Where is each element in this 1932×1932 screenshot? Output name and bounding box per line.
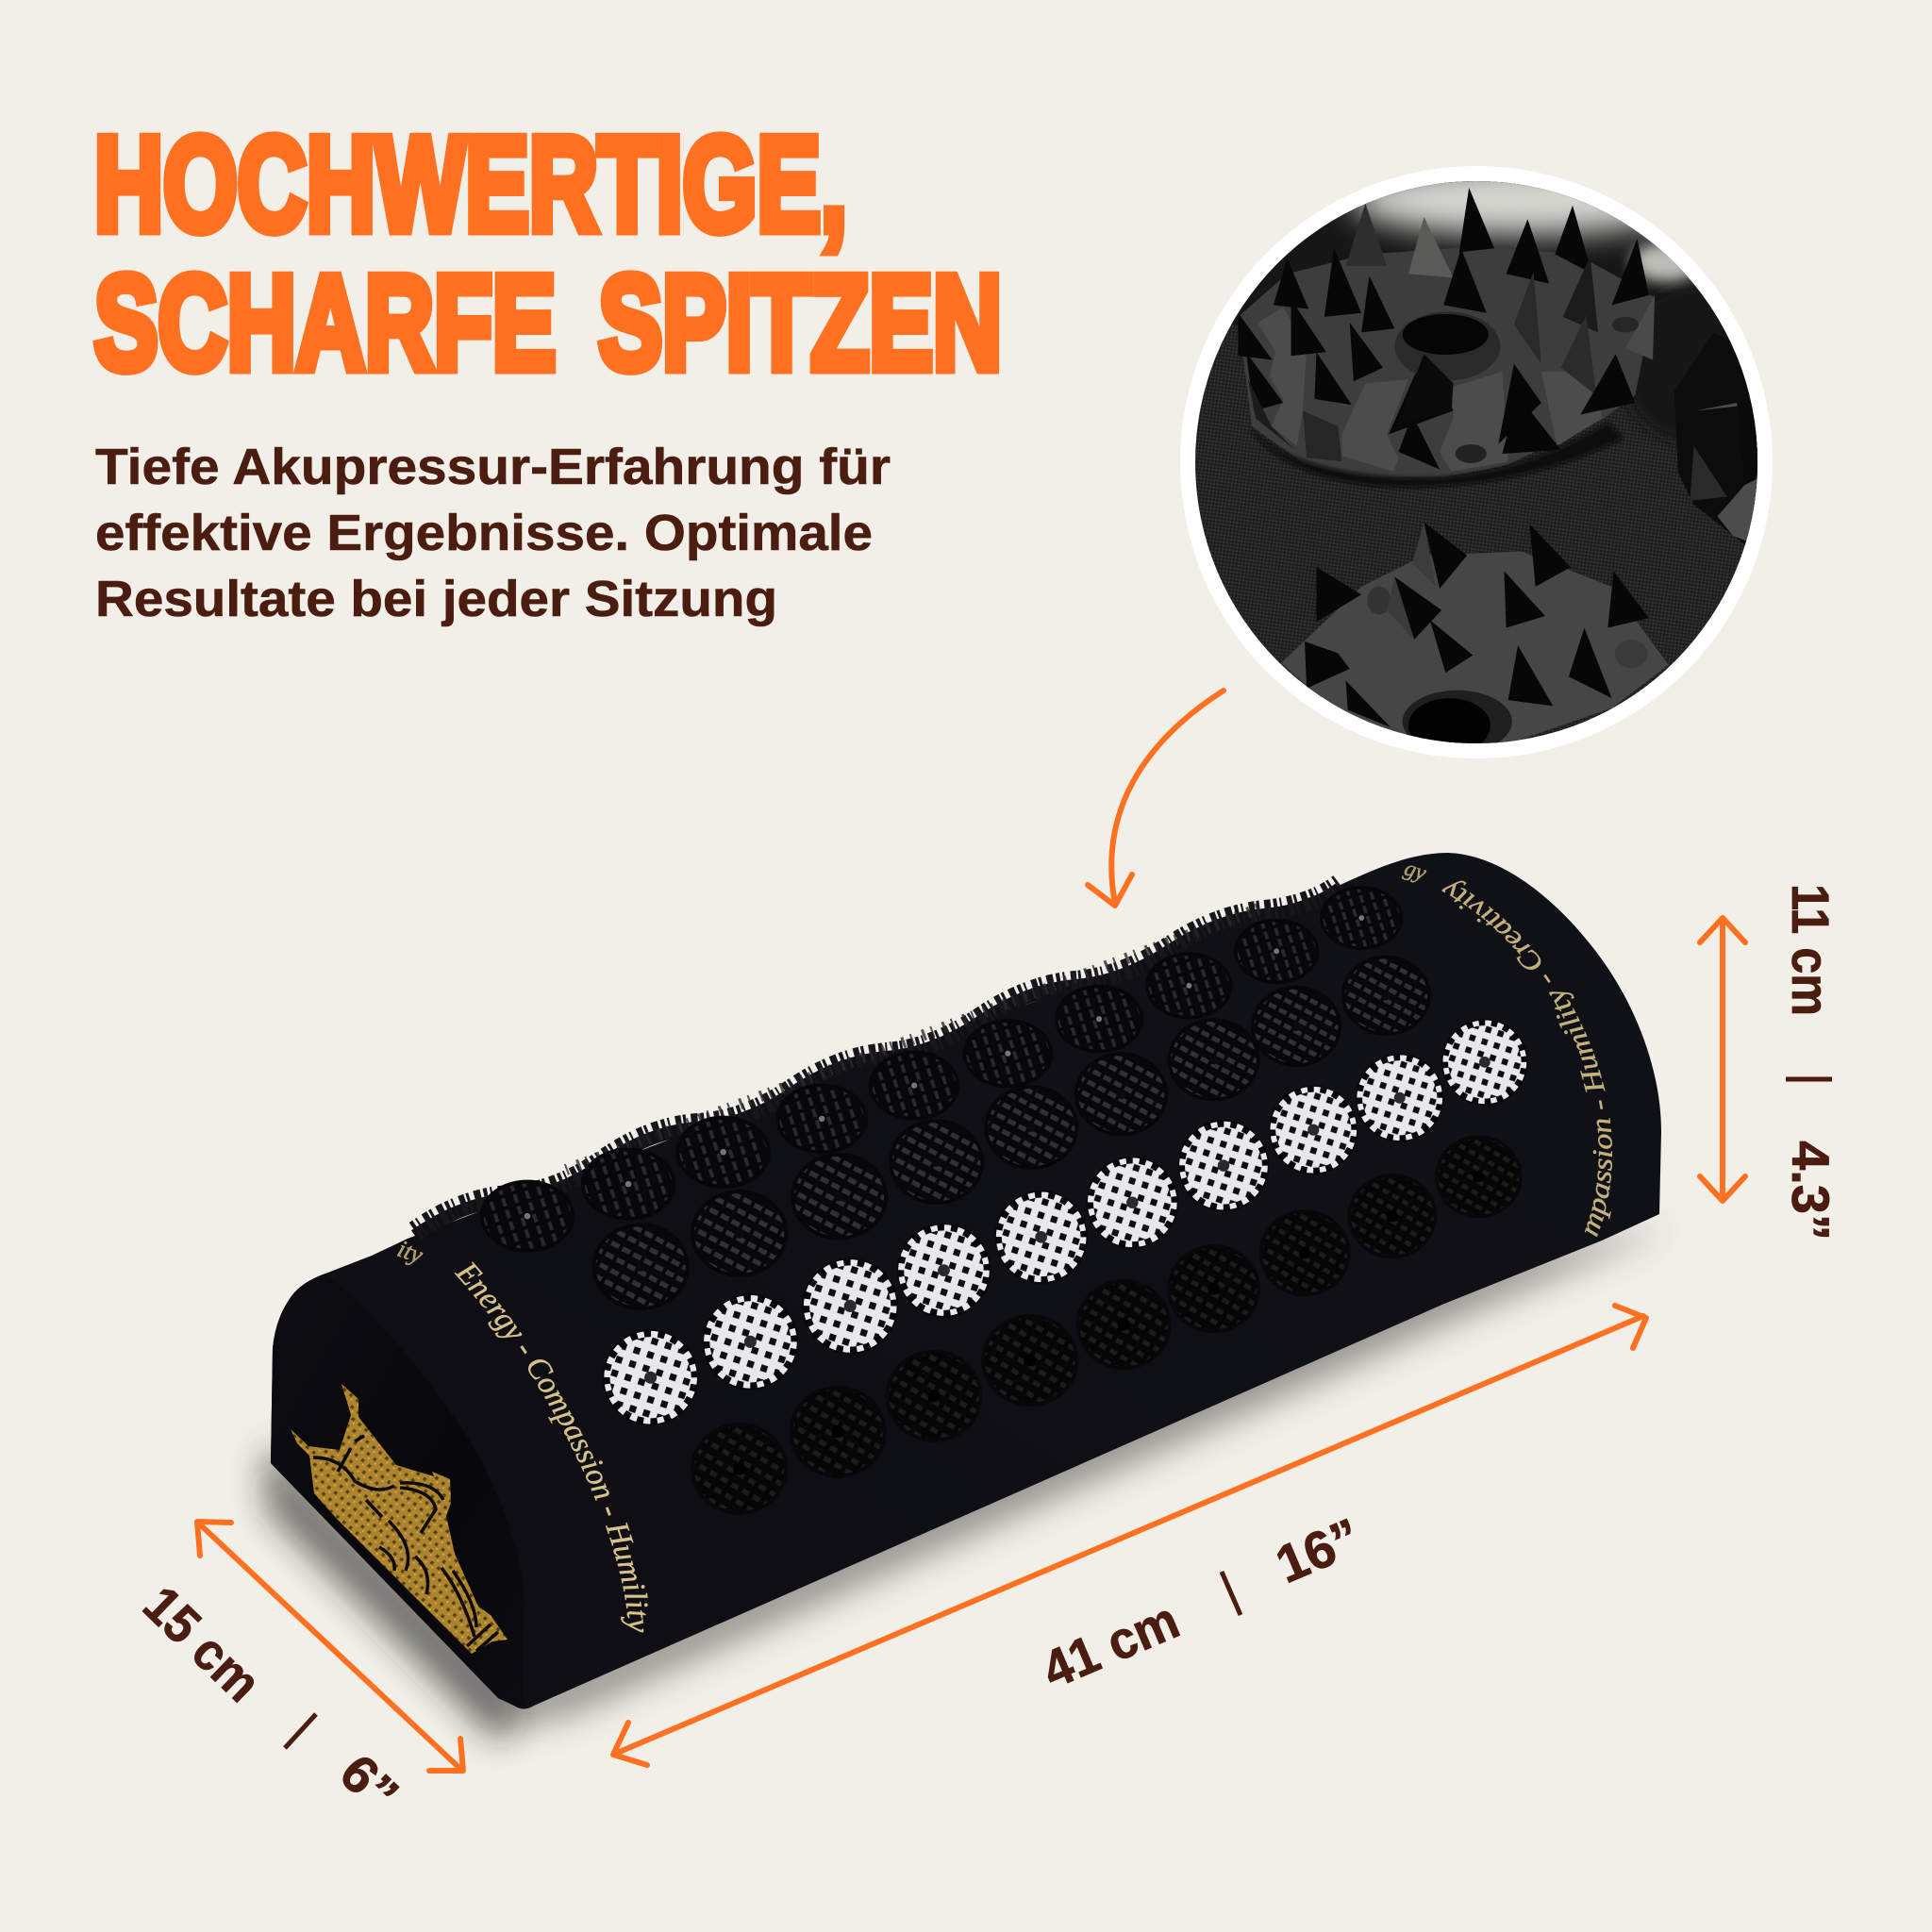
black spikes	[1239, 188, 1655, 470]
gold lettering near end: ity	[394, 1235, 427, 1269]
width dimension arrow	[613, 1306, 1646, 1765]
spikes along ridge	[415, 884, 1340, 1236]
body text: effektive Ergebnisse. Optimale	[95, 505, 873, 561]
height dimension arrow	[1700, 918, 1745, 1201]
label: 11 cm / 4.3 inches: 11 cm	[1781, 884, 1840, 1016]
label: 15 cm / 6 inches: 6”	[328, 1742, 410, 1824]
label: 15 cm / 6 inches: 15 cm	[132, 1574, 273, 1713]
body text: Tiefe Akupressur-Erfahrung für	[95, 439, 891, 495]
spike discs	[482, 888, 1528, 1514]
gold mandala	[291, 1384, 508, 1654]
label: 41 cm / 16 inches: 41 cm	[1034, 1590, 1188, 1700]
row 3 white discs	[603, 1019, 1528, 1425]
upper spike disc	[1239, 188, 1655, 487]
cloth background	[1195, 181, 1757, 743]
body text	[95, 439, 891, 627]
title	[94, 109, 1002, 398]
centre hole of upper disc	[1394, 311, 1500, 380]
circular close-up photo of spikes	[1170, 160, 1783, 774]
row 1 top discs	[482, 888, 1402, 1251]
row 2 bluish discs	[594, 957, 1429, 1308]
label: 41 cm / 16 inches: 16”	[1267, 1507, 1369, 1594]
body text: Resultate bei jeder Sitzung	[95, 571, 777, 627]
end face	[271, 1274, 524, 1706]
title: HOCHWERTIGE,	[94, 109, 847, 259]
row 4 black discs	[691, 1136, 1522, 1514]
label: 15 cm / 6 inches	[132, 1574, 410, 1824]
gold lettering far end: gy	[1401, 856, 1429, 886]
gold lettering near end: Energy - Compassion - Humility	[455, 1261, 648, 1632]
light plate strips	[1257, 307, 1602, 472]
gold lettering far end: mpassion - Humility - Creativity	[1441, 881, 1613, 1238]
pillow body	[271, 853, 1661, 1709]
label: 11 cm / 4.3 inches: 4.3”	[1781, 1141, 1840, 1241]
lower spike disc	[1281, 523, 1669, 753]
label: 41 cm / 16 inches	[1034, 1507, 1369, 1700]
label: 11 cm / 4.3 inches	[1781, 884, 1840, 1241]
soft shadow under pillow	[259, 1226, 1670, 1745]
depth dimension arrow	[197, 1522, 463, 1771]
curved arrow from photo to pillow	[1088, 691, 1224, 906]
title: SCHARFE SPITZEN	[94, 248, 1002, 398]
acupressure pillow	[271, 853, 1661, 1709]
right spike disc	[1674, 332, 1757, 545]
